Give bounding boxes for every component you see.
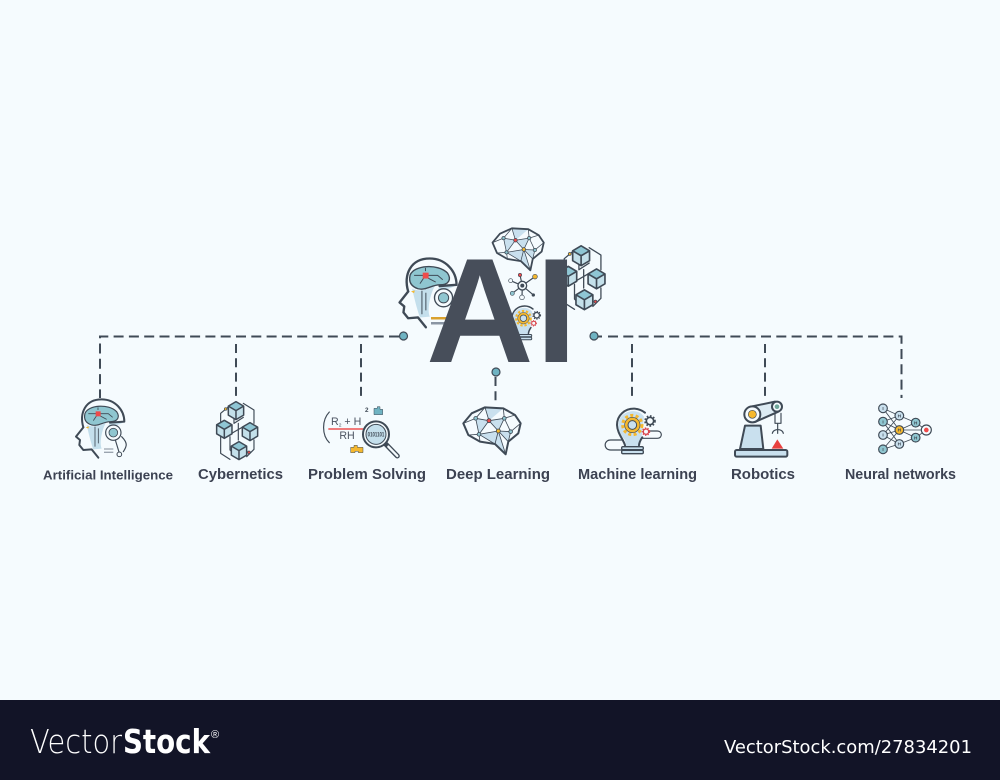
label: Cybernetics bbox=[198, 467, 283, 483]
icon: formula and magnifier: RH bbox=[339, 430, 355, 442]
icon: neural network diagram: H bbox=[898, 442, 902, 447]
connector dot: centre bbox=[492, 368, 500, 376]
icon: neural network diagram: I bbox=[882, 419, 884, 424]
icon: neural network diagram: I bbox=[882, 406, 884, 411]
item: Cybernetics bbox=[198, 402, 283, 483]
icon: neural network diagram: H bbox=[898, 428, 902, 433]
icon: neural network diagram: H bbox=[898, 413, 902, 418]
icon: neural network diagram: H bbox=[914, 420, 918, 425]
item: Neural networks bbox=[845, 404, 956, 483]
label: Neural networks bbox=[845, 467, 956, 483]
connector: centre bbox=[494, 377, 496, 405]
icon: formula and magnifier: 2 bbox=[365, 407, 369, 414]
icon: formula and magnifier: 0101101 bbox=[368, 432, 385, 438]
icon: formula and magnifier: + H bbox=[341, 416, 361, 428]
icon: formula and magnifier: 2 bbox=[339, 423, 342, 429]
label: Machine learning bbox=[578, 467, 697, 483]
icon: head accent bars bbox=[431, 317, 451, 324]
icon: top network node bbox=[509, 273, 537, 300]
icon: neural network diagram: H bbox=[914, 435, 918, 440]
item: Machine learning bbox=[578, 409, 697, 483]
icon: top bulb bbox=[512, 306, 540, 340]
icon: light bulb with gears bbox=[605, 409, 661, 454]
item: Artificial Intelligence bbox=[43, 399, 173, 482]
label: Problem Solving bbox=[308, 467, 426, 483]
label: Artificial Intelligence bbox=[43, 468, 173, 482]
icon: top head bbox=[400, 259, 457, 327]
icon: neural network diagram: I bbox=[882, 433, 884, 438]
item: Problem Solving bbox=[308, 407, 426, 483]
footer logo: Stock bbox=[123, 722, 211, 761]
footer image id: VectorStock.com/27834201 bbox=[724, 737, 972, 758]
footer bar bbox=[0, 700, 1000, 780]
item: Deep Learning bbox=[446, 407, 550, 483]
icon: neural network diagram bbox=[879, 404, 931, 454]
icon: top brain bbox=[493, 228, 544, 270]
connector dot: right bbox=[590, 332, 598, 340]
icon: formula and magnifier bbox=[324, 407, 397, 456]
footer logo: ® bbox=[211, 729, 219, 741]
icon: robot arm bbox=[735, 402, 787, 457]
connector: right branch bbox=[598, 336, 902, 398]
icon: cube cluster bbox=[217, 402, 258, 460]
icon: top cube cluster bbox=[560, 246, 605, 310]
footer logo bbox=[30, 722, 219, 761]
title: AI: AI bbox=[426, 227, 577, 394]
item: Robotics bbox=[731, 402, 795, 483]
connector dot: left bbox=[400, 332, 408, 340]
icon: formula and magnifier: R bbox=[331, 416, 339, 428]
label: Deep Learning bbox=[446, 467, 550, 483]
footer logo: Vector bbox=[30, 722, 122, 761]
icon: neural network diagram: I bbox=[882, 447, 884, 452]
connector: left branch bbox=[100, 336, 399, 398]
icon: AI head bbox=[76, 399, 126, 458]
label: Robotics bbox=[731, 467, 795, 483]
icon: brain bbox=[463, 407, 521, 454]
